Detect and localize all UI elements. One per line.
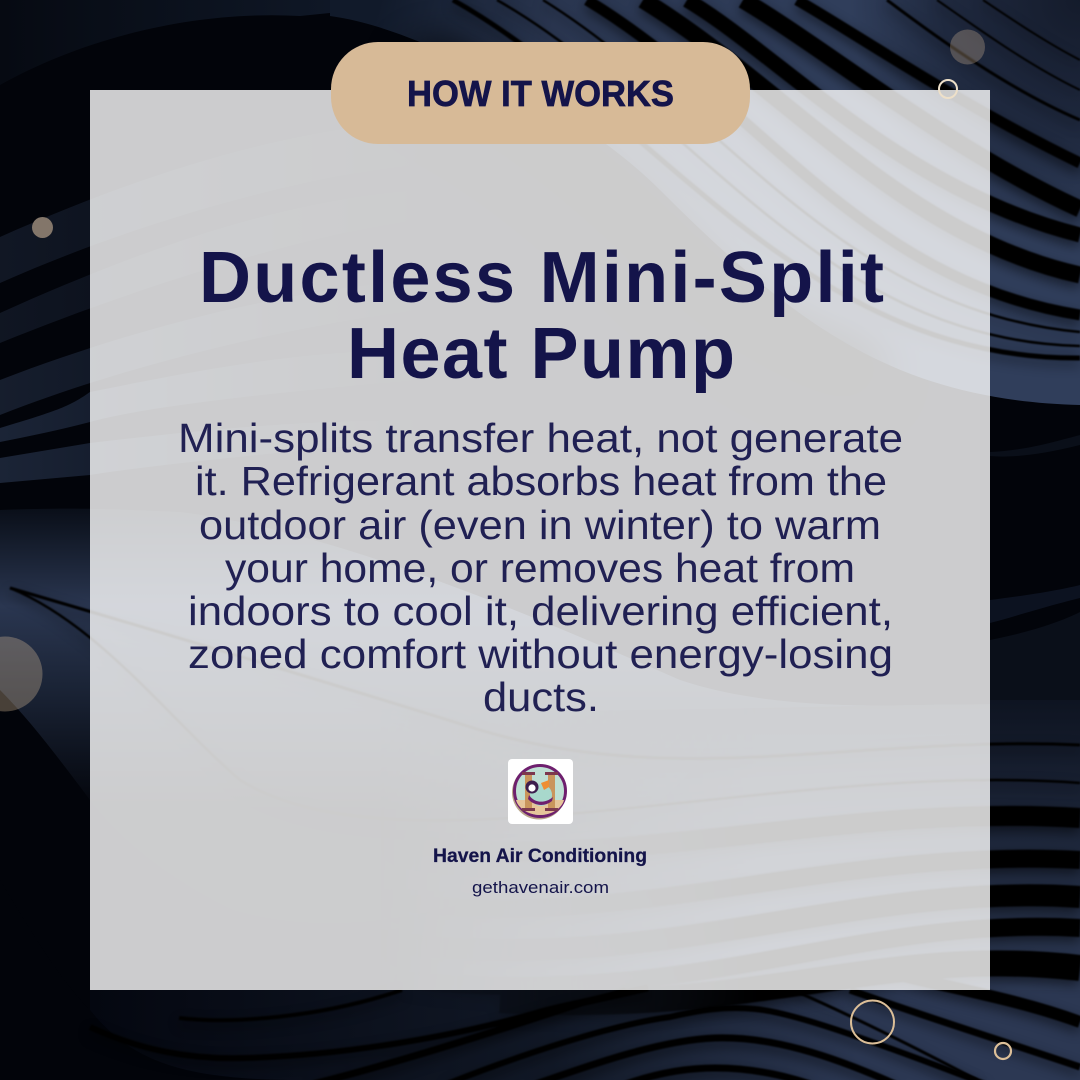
logo: Haven Air Conditioning badge [508, 759, 573, 824]
ring: small bottom right [995, 1043, 1011, 1059]
title: Ductless Mini-Split [199, 238, 884, 318]
body text: it. Refrigerant absorbs heat from the [195, 458, 887, 504]
ring: large bottom [851, 1000, 894, 1044]
decorative circle: small tan left [32, 217, 53, 238]
badge: how it works [331, 42, 750, 144]
company name: Haven Air Conditioning [433, 846, 647, 867]
body text: ducts. [483, 674, 599, 720]
body text: outdoor air (even in winter) to warm [199, 502, 881, 548]
body text [178, 415, 903, 720]
website: gethavenair.com [472, 878, 609, 897]
body text: Mini-splits transfer heat, not generate [178, 415, 903, 461]
decorative circle: grey top right [950, 30, 985, 64]
body text: zoned comfort without energy-losing [188, 631, 893, 677]
title: Heat Pump [347, 314, 735, 394]
title [199, 238, 884, 394]
panel: translucent white card [90, 90, 990, 990]
ring: top right [939, 80, 957, 98]
body text: indoors to cool it, delivering efficient, [188, 588, 893, 634]
body text: your home, or removes heat from [225, 545, 855, 591]
decorative circle: large translucent left [0, 636, 42, 712]
badge: how it works: HOW IT WORKS [407, 73, 674, 114]
